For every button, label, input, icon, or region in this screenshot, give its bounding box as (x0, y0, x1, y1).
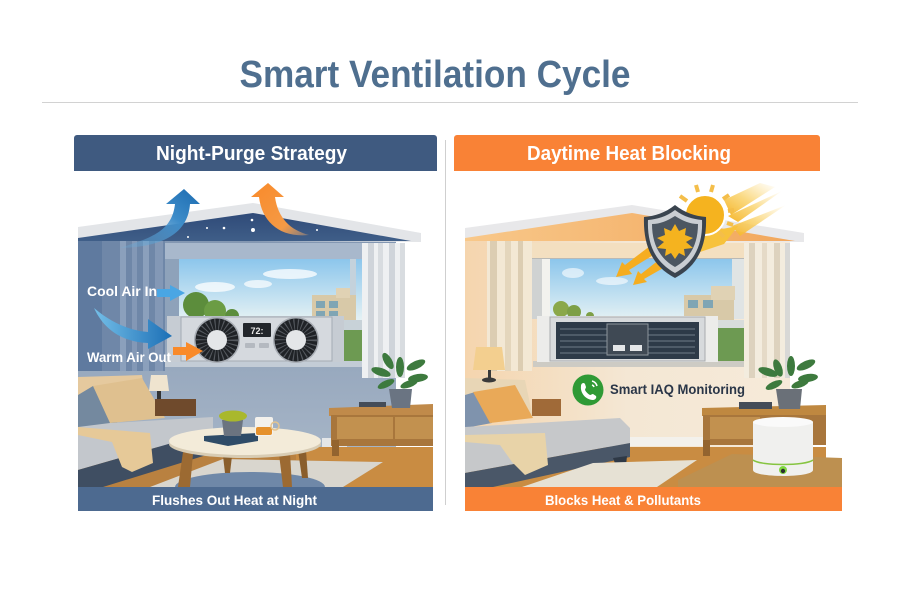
floor base (465, 447, 826, 487)
side table (532, 399, 561, 416)
label: cool air in: Cool Air In (87, 283, 157, 299)
heading: night-purge strategy (74, 135, 437, 171)
arrows: deflected heat (616, 246, 665, 285)
wall (465, 241, 790, 447)
temperature display: 72: (250, 326, 264, 336)
book, plant and tea cup (204, 410, 279, 446)
right curtain (744, 243, 790, 378)
callout: smart IAQ monitoring: Smart IAQ Monitoring (610, 381, 745, 397)
heading: daytime heat blocking: Daytime Heat Blocking (527, 143, 731, 165)
air quality monitor (753, 417, 813, 476)
floor (296, 447, 433, 487)
callout: smart IAQ monitoring (572, 374, 745, 406)
floor base (78, 447, 433, 487)
caption bar (78, 487, 433, 511)
caption bar: Flushes Out Heat at Night (152, 492, 317, 508)
AC unit with fans (167, 316, 344, 363)
arrow: cool air in (157, 285, 185, 301)
icon: shield (644, 205, 706, 278)
panel: night-purge strategy (74, 135, 437, 511)
roof (78, 203, 421, 242)
heading: daytime heat blocking (454, 135, 820, 171)
left curtain (487, 241, 532, 371)
lamp (473, 347, 505, 382)
console table (702, 402, 826, 456)
left curtain (78, 241, 165, 371)
foreground table (678, 454, 842, 487)
icon: sun (680, 185, 734, 237)
temperature display (243, 323, 271, 337)
sofa (78, 375, 213, 487)
illustration: daytime room (465, 205, 842, 511)
sofa (465, 378, 630, 487)
fan left (194, 317, 240, 363)
icon: green phone badge (572, 374, 604, 406)
window (162, 243, 364, 361)
window sill (533, 361, 745, 367)
right curtain (362, 243, 405, 378)
rug (150, 459, 383, 502)
roof (465, 205, 804, 242)
coffee table (169, 427, 321, 487)
illustration: night room (78, 203, 433, 511)
wall (78, 241, 396, 447)
arrow: warm air out (173, 342, 203, 361)
label: warm air out: Warm Air Out (87, 349, 171, 365)
potted plant (757, 356, 818, 409)
heading: night-purge strategy: Night-Purge Strategy (156, 143, 348, 165)
fan right (273, 317, 319, 363)
caption bar (465, 487, 842, 511)
potted plant (370, 351, 428, 408)
console table (329, 402, 433, 456)
AC unit with closed louvres (537, 316, 718, 362)
panel: daytime heat blocking (454, 135, 842, 511)
rug (522, 460, 697, 487)
baseboard (630, 437, 705, 446)
side table and lamp (149, 375, 196, 416)
arrow: blue exhaust up (120, 189, 200, 248)
window sill (165, 361, 362, 367)
arrow: large blue intake (94, 308, 172, 349)
window (532, 243, 746, 361)
arrow: orange exhaust up (251, 183, 309, 235)
title: Smart Ventilation Cycle (240, 54, 630, 96)
sun beams (700, 183, 786, 252)
caption bar: Blocks Heat & Pollutants (545, 492, 701, 508)
